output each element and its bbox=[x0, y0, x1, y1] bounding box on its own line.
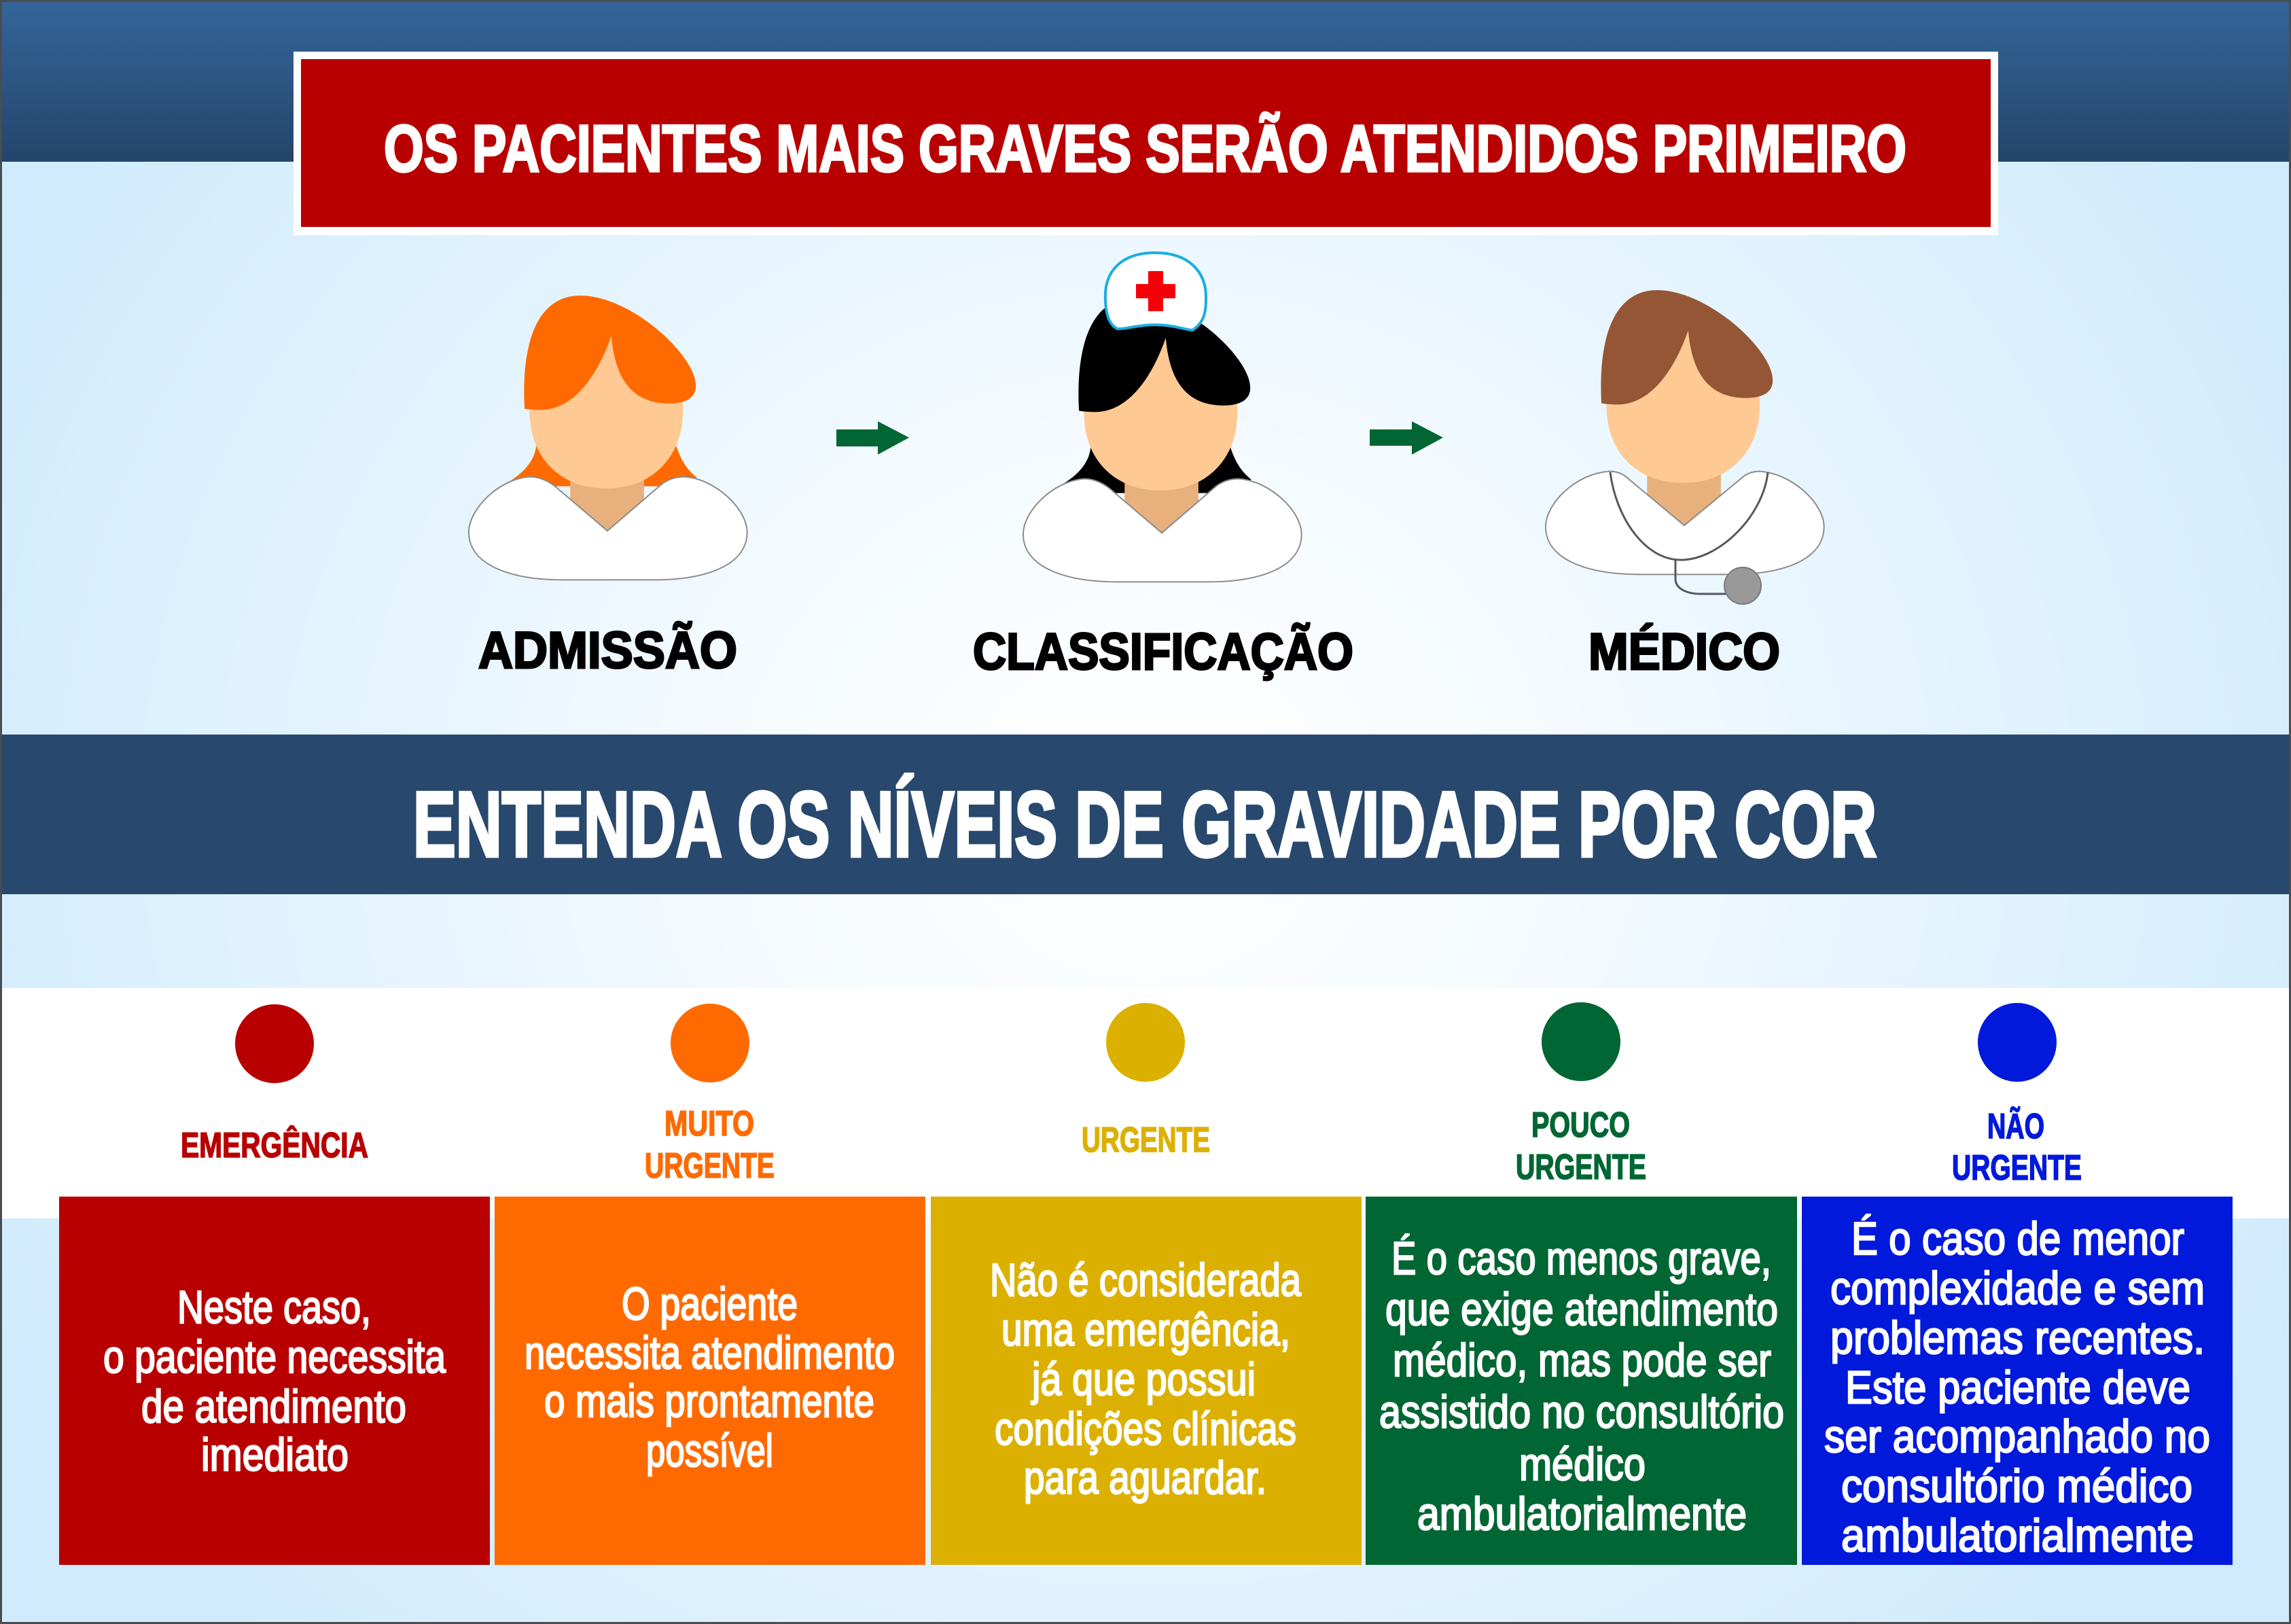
person: classificação bbox=[1023, 253, 1302, 582]
label: classificação: CLASSIFICAÇÃO bbox=[973, 623, 1353, 681]
panel: muito urgente: necessita atendimento bbox=[525, 1327, 895, 1379]
arrow: classificação to médico bbox=[1370, 421, 1443, 455]
label: muito urgente: MUITO bbox=[664, 1104, 754, 1144]
column: muito urgente bbox=[495, 1004, 925, 1565]
panel: pouco urgente: assistido no consultório bbox=[1379, 1386, 1784, 1438]
panel: emergência: o paciente necessita bbox=[103, 1331, 446, 1383]
dot: muito urgente bbox=[671, 1004, 749, 1082]
panel: não urgente: É o caso de menor bbox=[1851, 1213, 2184, 1265]
title banner bbox=[294, 52, 1998, 235]
header band bbox=[0, 0, 2291, 162]
dot: não urgente bbox=[1978, 1003, 2057, 1082]
label: médico: MÉDICO bbox=[1588, 623, 1780, 681]
title banner: OS PACIENTES MAIS GRAVES SERÃO ATENDIDOS PRIMEIRO bbox=[384, 111, 1906, 186]
panel: pouco urgente: médico, mas pode ser bbox=[1393, 1335, 1771, 1386]
column: urgente bbox=[931, 1003, 1362, 1565]
person: admissão bbox=[469, 296, 747, 580]
label: pouco urgente: POUCO bbox=[1531, 1106, 1630, 1145]
column: não urgente bbox=[1802, 1003, 2233, 1565]
panel: não urgente: complexidade e sem bbox=[1830, 1263, 2205, 1314]
panel: não urgente: ambulatorialmente bbox=[1841, 1510, 2194, 1561]
section heading band bbox=[0, 735, 2291, 894]
panel: não urgente bbox=[1802, 1197, 2233, 1565]
panel: emergência bbox=[59, 1197, 490, 1565]
panel: emergência: de atendimento bbox=[141, 1381, 406, 1432]
panel: muito urgente bbox=[495, 1197, 925, 1565]
dot: urgente bbox=[1106, 1003, 1185, 1082]
panel: urgente: condições clínicas bbox=[995, 1403, 1296, 1455]
label: não urgente: NÃO bbox=[1987, 1106, 2044, 1146]
dot: pouco urgente bbox=[1542, 1002, 1620, 1081]
column: emergência bbox=[59, 1004, 490, 1565]
panel: pouco urgente bbox=[1366, 1197, 1797, 1565]
arrow: admissão to classificação bbox=[836, 421, 909, 455]
label: emergência: EMERGÊNCIA bbox=[181, 1125, 368, 1165]
panel: não urgente: problemas recentes. bbox=[1830, 1312, 2205, 1364]
person: médico bbox=[1546, 290, 1824, 604]
column: pouco urgente bbox=[1366, 1002, 1797, 1565]
icon: nurse cap bbox=[1105, 253, 1206, 330]
label: pouco urgente bbox=[1516, 1106, 1646, 1187]
label: pouco urgente: URGENTE bbox=[1516, 1148, 1646, 1187]
panel: muito urgente: O paciente bbox=[622, 1278, 798, 1330]
white legend strip bbox=[0, 988, 2291, 1218]
panel: muito urgente: o mais prontamente bbox=[544, 1375, 874, 1427]
panel: muito urgente: possível bbox=[646, 1425, 773, 1477]
panel: pouco urgente: É o caso menos grave, bbox=[1391, 1233, 1771, 1284]
label: admissão: ADMISSÃO bbox=[478, 622, 737, 679]
panel: urgente: Não é considerada bbox=[990, 1254, 1301, 1306]
panel: emergência: imediato bbox=[201, 1429, 349, 1481]
panel: urgente: para aguardar. bbox=[1024, 1452, 1266, 1504]
panel: não urgente: Este paciente deve bbox=[1845, 1362, 2190, 1413]
label: urgente: URGENTE bbox=[1082, 1120, 1210, 1160]
label: não urgente bbox=[1952, 1106, 2082, 1188]
dot: emergência bbox=[235, 1004, 314, 1083]
panel: pouco urgente: ambulatorialmente bbox=[1417, 1488, 1747, 1540]
panel: emergência: Neste caso, bbox=[177, 1282, 371, 1333]
label: muito urgente bbox=[645, 1104, 775, 1186]
panel: urgente bbox=[931, 1197, 1362, 1565]
panel: não urgente: consultório médico bbox=[1841, 1460, 2192, 1512]
icon: stethoscope bbox=[1610, 472, 1768, 604]
label: não urgente: URGENTE bbox=[1952, 1148, 2082, 1188]
panel: urgente: já que possui bbox=[1031, 1354, 1256, 1405]
panel: pouco urgente: que exige atendimento bbox=[1385, 1284, 1778, 1335]
label: muito urgente: URGENTE bbox=[645, 1146, 775, 1186]
panel: urgente: uma emergência, bbox=[1001, 1304, 1290, 1356]
panel: não urgente: ser acompanhado no bbox=[1824, 1411, 2210, 1462]
panel: pouco urgente: médico bbox=[1519, 1438, 1646, 1490]
